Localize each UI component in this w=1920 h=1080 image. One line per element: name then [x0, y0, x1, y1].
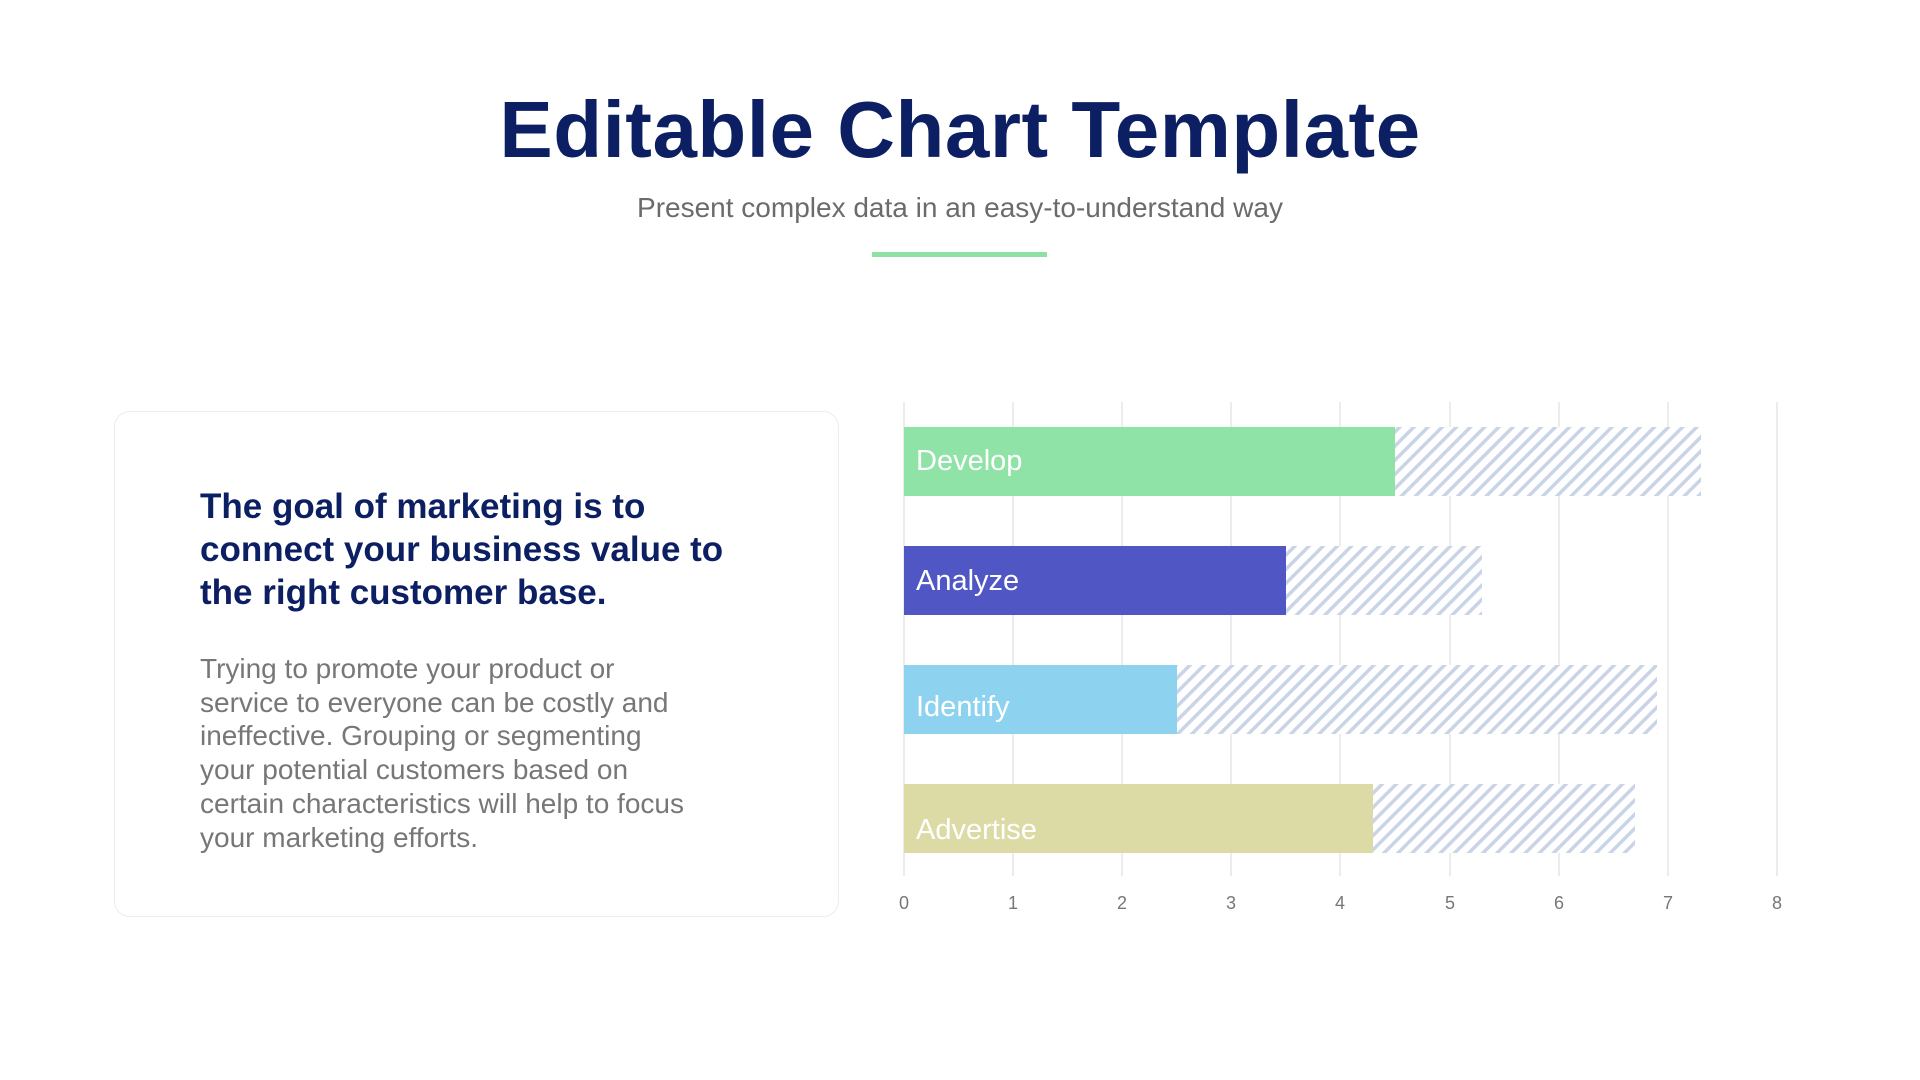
- x axis labels: 1: [1008, 893, 1018, 913]
- bar: Analyze: Analyze: [916, 565, 1019, 597]
- x axis labels: 0: [899, 893, 909, 913]
- panel: text card: [114, 411, 839, 917]
- x axis labels: 3: [1226, 893, 1236, 913]
- bar: Advertise: [904, 784, 1635, 853]
- bar: Analyze: [904, 546, 1482, 615]
- subtitle: Present complex data in an easy-to-understand way: [637, 192, 1283, 223]
- bar: Identify: Identify: [916, 691, 1010, 723]
- accent line: [872, 252, 1047, 257]
- bar: Develop: Develop: [916, 445, 1022, 477]
- x axis labels: 2: [1117, 893, 1127, 913]
- body text: Trying to promote your product or service to everyone can be costly and ineffective. Grouping or segmenting your potential customers based on certain characteristics will help to focus your marketing efforts.: [200, 653, 684, 853]
- heading: The goal of marketing is to connect your business value to the right customer base.: [200, 487, 723, 612]
- bar: Advertise: Advertise: [916, 814, 1037, 846]
- x axis labels: [899, 893, 1782, 913]
- x axis labels: 4: [1335, 893, 1345, 913]
- bar: Develop: [904, 427, 1701, 496]
- x axis labels: 5: [1445, 893, 1455, 913]
- x axis labels: 8: [1772, 893, 1782, 913]
- bar: Identify: [904, 665, 1657, 734]
- x axis labels: 6: [1554, 893, 1564, 913]
- title: Editable Chart Template: [499, 85, 1421, 174]
- x axis labels: 7: [1663, 893, 1673, 913]
